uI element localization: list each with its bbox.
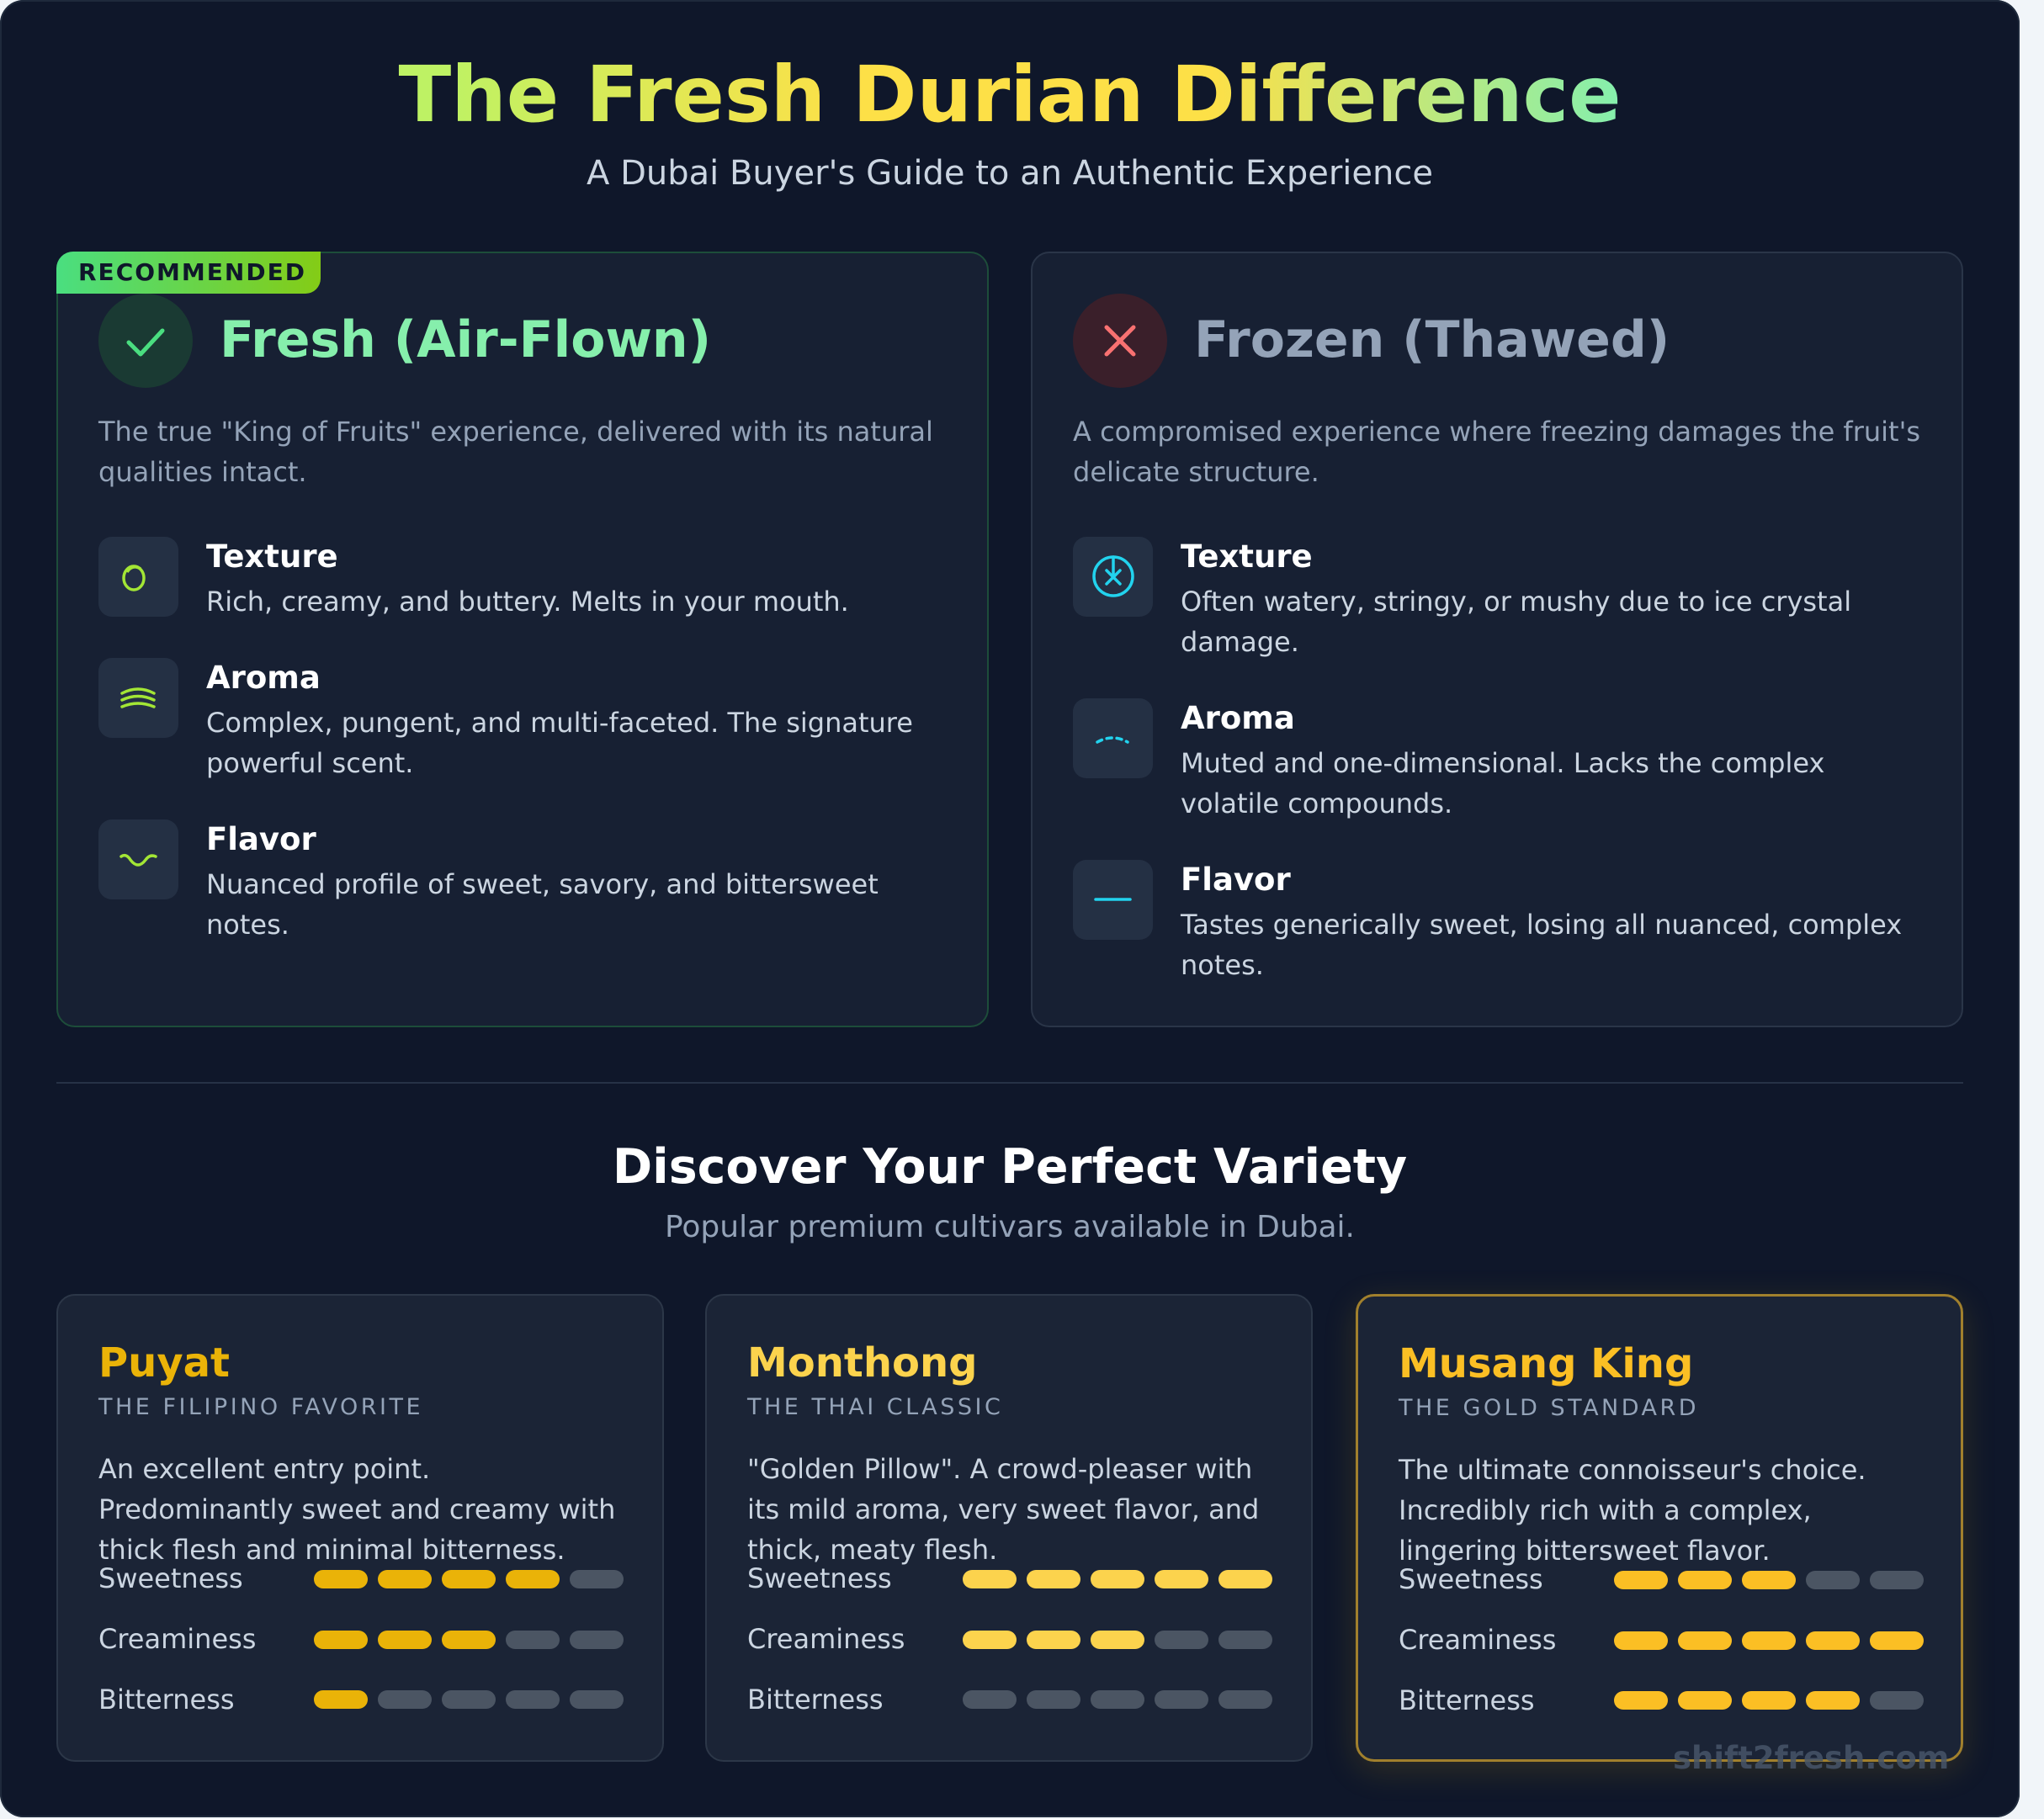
description: The ultimate connoisseur's choice. bbox=[1399, 1454, 1866, 1486]
card: puyat bbox=[56, 1294, 664, 1762]
watermark: shift2fresh.com bbox=[1673, 1740, 1949, 1776]
text: texture: Rich, creamy, and buttery. Melts in your mouth. bbox=[206, 586, 849, 618]
text: texture: Often watery, stringy, or mushy due to ice crystal bbox=[1181, 586, 1851, 618]
description bbox=[747, 1453, 1259, 1566]
text: aroma: Muted and one-dimensional. Lacks the complex bbox=[1181, 747, 1824, 779]
text: texture: damage. bbox=[1181, 626, 1299, 658]
icon: flavor bbox=[1073, 860, 1153, 940]
description: delicate structure. bbox=[1073, 456, 1319, 488]
rating: sweetness: Sweetness bbox=[98, 1562, 243, 1594]
subheading: Popular premium cultivars available in Dubai. bbox=[665, 1210, 1355, 1244]
text: texture bbox=[1181, 586, 1851, 658]
description: A compromised experience where freezing damages the fruit's bbox=[1073, 416, 1920, 448]
subtitle: A Dubai Buyer's Guide to an Authentic Experience bbox=[587, 154, 1433, 193]
bars: creaminess bbox=[1614, 1631, 1924, 1650]
bars: creaminess bbox=[314, 1631, 624, 1649]
name: Musang King bbox=[1399, 1340, 1693, 1387]
description: thick flesh and minimal bitterness. bbox=[98, 1534, 565, 1566]
description bbox=[1399, 1454, 1866, 1567]
icon: texture bbox=[98, 537, 178, 617]
description: thick, meaty flesh. bbox=[747, 1534, 997, 1566]
rating: sweetness: Sweetness bbox=[747, 1562, 892, 1594]
description: "Golden Pillow". A crowd-pleaser with bbox=[747, 1453, 1252, 1485]
text: aroma: Complex, pungent, and multi-faceted. The signature bbox=[206, 707, 913, 739]
heading: varieties: Discover Your Perfect Variety bbox=[613, 1139, 1407, 1195]
heading: fresh: Fresh (Air-Flown) bbox=[220, 310, 711, 369]
item: texture: Texture bbox=[1181, 538, 1313, 575]
badge: recommended bbox=[56, 252, 321, 294]
description bbox=[98, 1453, 615, 1566]
icon: flavor bbox=[98, 819, 178, 899]
description: An excellent entry point. bbox=[98, 1453, 430, 1485]
icon: check bbox=[98, 294, 193, 388]
text: flavor: Nuanced profile of sweet, savory, and bittersweet bbox=[206, 868, 879, 900]
rating: creaminess: Creaminess bbox=[98, 1623, 256, 1655]
description: lingering bittersweet flavor. bbox=[1399, 1535, 1771, 1567]
text: aroma bbox=[206, 707, 913, 779]
text: aroma: volatile compounds. bbox=[1181, 788, 1452, 819]
item: texture: Texture bbox=[206, 538, 338, 575]
icon: texture bbox=[1073, 537, 1153, 617]
item: aroma: Aroma bbox=[206, 660, 321, 696]
description: The true "King of Fruits" experience, delivered with its natural bbox=[98, 416, 933, 448]
rating: bitterness: Bitterness bbox=[747, 1684, 884, 1716]
tagline: THE THAI CLASSIC bbox=[747, 1394, 1003, 1420]
text: flavor bbox=[1180, 909, 1902, 981]
text: aroma: powerful scent. bbox=[206, 747, 413, 779]
bars: bitterness bbox=[314, 1690, 624, 1709]
description: Incredibly rich with a complex, bbox=[1399, 1494, 1812, 1526]
panel: fresh bbox=[56, 252, 989, 1027]
bars: sweetness bbox=[1614, 1571, 1924, 1589]
text: aroma bbox=[1181, 747, 1824, 819]
heading: frozen: Frozen (Thawed) bbox=[1194, 310, 1670, 369]
text: flavor bbox=[206, 868, 879, 941]
icon: aroma bbox=[1073, 698, 1153, 778]
item: flavor: Flavor bbox=[206, 821, 316, 857]
icon: cross bbox=[1073, 294, 1167, 388]
title: The Fresh Durian Difference bbox=[398, 50, 1622, 140]
badge: recommended: RECOMMENDED bbox=[78, 258, 306, 286]
bars: sweetness bbox=[314, 1570, 624, 1588]
title bbox=[0, 46, 2020, 144]
name: Monthong bbox=[747, 1339, 978, 1387]
description bbox=[98, 416, 933, 488]
item: flavor: Flavor bbox=[1181, 862, 1291, 898]
name: Puyat bbox=[98, 1339, 230, 1387]
description: its mild aroma, very sweet flavor, and bbox=[747, 1493, 1259, 1525]
tagline: THE FILIPINO FAVORITE bbox=[98, 1394, 423, 1420]
bars: bitterness bbox=[963, 1690, 1272, 1709]
card: monthong bbox=[705, 1294, 1313, 1762]
rating: creaminess: Creaminess bbox=[747, 1623, 905, 1655]
panel: frozen bbox=[1031, 252, 1963, 1027]
rating: sweetness: Sweetness bbox=[1399, 1563, 1543, 1595]
bars: creaminess bbox=[963, 1631, 1272, 1649]
bars: bitterness bbox=[1614, 1691, 1924, 1710]
bars: sweetness bbox=[963, 1570, 1272, 1588]
text: flavor: notes. bbox=[1181, 949, 1264, 981]
card: musang king bbox=[1356, 1294, 1963, 1762]
text: flavor: notes. bbox=[206, 909, 289, 941]
rating: bitterness: Bitterness bbox=[98, 1684, 235, 1716]
rating: creaminess: Creaminess bbox=[1399, 1624, 1556, 1656]
description: qualities intact. bbox=[98, 456, 307, 488]
rating: bitterness: Bitterness bbox=[1399, 1684, 1535, 1716]
tagline: THE GOLD STANDARD bbox=[1399, 1395, 1699, 1421]
icon: aroma bbox=[98, 658, 178, 738]
description bbox=[1073, 416, 1920, 488]
item: aroma: Aroma bbox=[1181, 700, 1295, 736]
description: Predominantly sweet and creamy with bbox=[98, 1493, 615, 1525]
text: flavor: Tastes generically sweet, losing all nuanced, complex bbox=[1181, 909, 1902, 941]
